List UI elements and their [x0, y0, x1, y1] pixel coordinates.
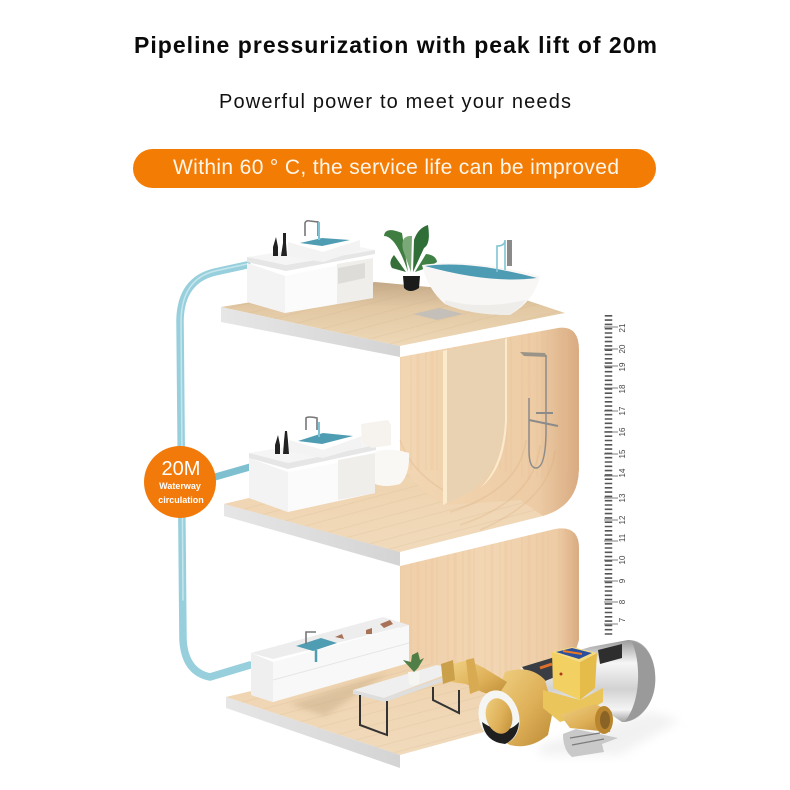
ruler numbers: 8 — [618, 599, 627, 604]
motor body — [520, 640, 655, 722]
top slab band — [400, 313, 565, 357]
valve flange — [543, 688, 603, 722]
circulation badge: Waterway — [159, 481, 201, 491]
middle soap bottles — [275, 431, 289, 454]
flow sensor box — [552, 652, 580, 700]
soap bottles — [273, 233, 287, 256]
ruler ticks — [605, 315, 612, 636]
middle wall — [224, 328, 579, 552]
ruler numbers: 20 — [618, 344, 627, 353]
top slab front — [221, 307, 400, 357]
circulation badge: 20M — [162, 458, 200, 480]
table plant — [403, 652, 424, 686]
curved wood grain — [400, 440, 555, 530]
ruler numbers: 19 — [618, 362, 627, 371]
ruler numbers: 16 — [618, 427, 627, 436]
ruler numbers: 10 — [618, 555, 627, 564]
building: middle storey — [224, 328, 593, 566]
inlet pipe — [452, 660, 507, 697]
ruler long ticks — [604, 327, 618, 624]
outlet pipe — [560, 704, 612, 732]
middle slab front — [224, 504, 400, 566]
circulation badge — [144, 446, 216, 518]
lower slab band — [400, 725, 515, 768]
subtitle: Powerful power to meet your needs — [219, 91, 571, 113]
title: Pipeline pressurization with peak lift of 20m — [134, 32, 657, 58]
shower fixture — [520, 352, 558, 468]
top vanity cabinet — [247, 221, 375, 313]
panel strips — [443, 338, 507, 505]
banner pill: Within 60 ° C, the service life can be improved — [173, 156, 619, 179]
toilet — [361, 420, 409, 486]
top floor — [221, 282, 565, 346]
glass panel — [447, 339, 505, 503]
counter shadow — [290, 672, 390, 716]
banner pill — [133, 149, 656, 188]
gauge ring — [473, 686, 525, 748]
building: top storey — [221, 282, 565, 357]
plant — [384, 225, 437, 291]
motor label — [522, 657, 560, 685]
food on counter — [335, 620, 393, 639]
circulation badge: circulation — [158, 495, 204, 505]
ruler numbers: 18 — [618, 384, 627, 393]
middle vanity cabinet — [249, 417, 376, 512]
mounting foot — [563, 729, 618, 757]
ruler numbers: 12 — [618, 515, 627, 524]
lower floor — [226, 654, 510, 755]
brass housing — [494, 669, 553, 746]
coffee table — [353, 652, 459, 735]
ruler numbers — [618, 323, 627, 622]
bathtub — [422, 240, 540, 315]
ruler numbers: 7 — [618, 617, 627, 622]
water pump — [441, 640, 680, 757]
top basin — [288, 221, 360, 262]
floor drain — [413, 308, 463, 320]
pump shadow — [540, 712, 680, 755]
height ruler — [604, 315, 627, 636]
kitchen counter — [251, 617, 409, 702]
ruler numbers: 9 — [618, 578, 627, 583]
lower slab front — [226, 697, 400, 768]
ruler numbers: 17 — [618, 406, 627, 415]
kitchen sink — [296, 638, 337, 651]
ruler numbers: 13 — [618, 493, 627, 502]
water pipe — [180, 264, 250, 677]
ruler numbers: 15 — [618, 449, 627, 458]
middle basin — [289, 417, 362, 458]
building: lower storey — [226, 528, 579, 768]
ruler numbers: 14 — [618, 468, 627, 477]
middle slab band — [400, 470, 593, 566]
ruler numbers: 21 — [618, 323, 627, 332]
brass cap — [482, 695, 516, 737]
middle floor surface — [224, 462, 543, 552]
ruler numbers: 11 — [618, 533, 627, 542]
lower wall — [400, 528, 579, 720]
